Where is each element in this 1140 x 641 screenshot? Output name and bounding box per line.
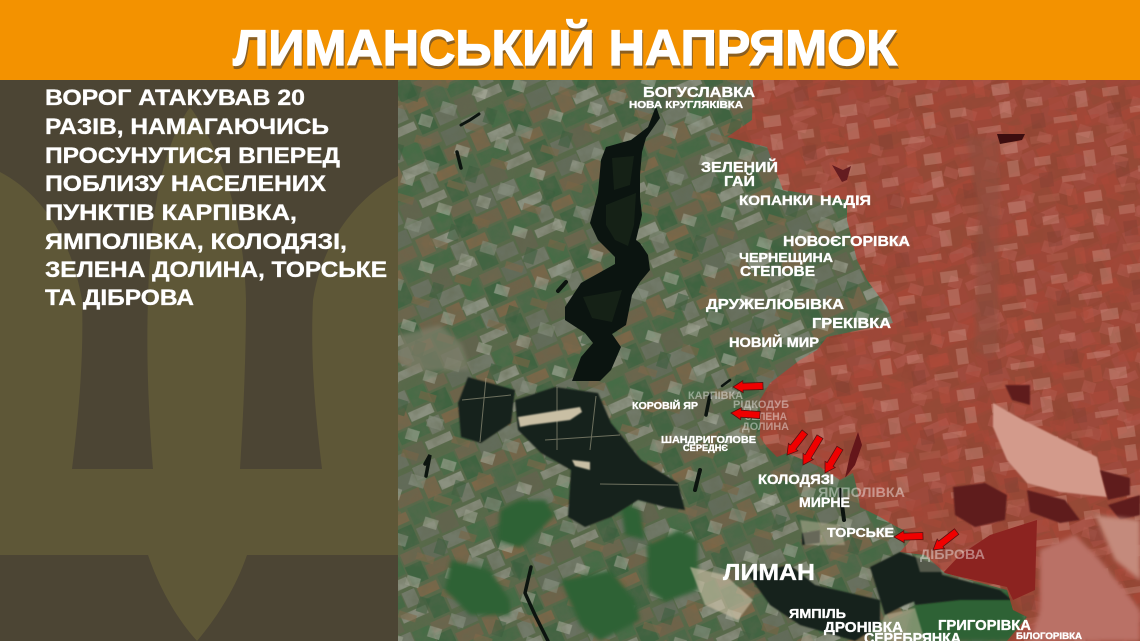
label: Bohuslavka: БОГУСЛАВКА bbox=[643, 84, 755, 101]
sand patches bbox=[518, 407, 962, 641]
town band bbox=[965, 135, 1000, 360]
description text block bbox=[45, 85, 387, 310]
label: Hai: ГАЙ bbox=[724, 172, 755, 190]
label: Druzheliubivka: ДРУЖЕЛЮБІВКА bbox=[706, 296, 844, 313]
label: Zelenyi: ЗЕЛЕНИЙ bbox=[701, 158, 778, 176]
line 6: ЯМПОЛІВКА, КОЛОДЯЗІ, bbox=[45, 229, 347, 254]
line 5: ПУНКТІВ КАРПІВКА, bbox=[45, 200, 297, 225]
label: Yampolivka: ЯМПОЛІВКА bbox=[818, 484, 905, 500]
header bar bbox=[0, 0, 1140, 80]
arrow: toward Dibrova bbox=[929, 527, 960, 555]
label: Dronivka: ДРОНІВКА bbox=[824, 620, 904, 636]
pale southern fields bbox=[1030, 535, 1140, 641]
label: Nova Kruhliakivka: НОВА КРУГЛЯКІВКА bbox=[629, 99, 743, 111]
title bbox=[233, 19, 898, 79]
label: Ridkodub: РІДКОДУБ bbox=[733, 399, 789, 411]
title shadow: ЛИМАНСЬКИЙ НАПРЯМОК bbox=[234, 22, 898, 79]
occupied territory red overlay bbox=[727, 80, 1140, 641]
attack arrows bbox=[731, 380, 960, 555]
line 3: ПРОСУНУТИСЯ ВПЕРЕД bbox=[45, 143, 340, 168]
label: Kopanky: КОПАНКИ bbox=[739, 192, 813, 208]
arrow: toward Karpivka bbox=[733, 380, 763, 393]
label: Nadiia: НАДІЯ bbox=[820, 192, 871, 208]
line 1: ВОРОГ АТАКУВАВ 20 bbox=[45, 85, 305, 110]
arrow: toward Zelena Dolyna bbox=[731, 407, 760, 421]
arrow: Kolodiazi one bbox=[782, 428, 810, 459]
dark red forests bbox=[953, 385, 1140, 527]
line 8: ТА ДІБРОВА bbox=[45, 285, 194, 310]
label: Novoiehorivka: НОВОЄГОРІВКА bbox=[783, 233, 910, 250]
label: Chernechshyna: ЧЕРНЕЩИНА bbox=[739, 250, 834, 265]
label: Zelena: ЗЕЛЕНА bbox=[745, 411, 787, 423]
label: Lyman: ЛИМАН bbox=[723, 559, 815, 585]
arrow: Kolodiazi two bbox=[798, 434, 825, 468]
line 7: ЗЕЛЕНА ДОЛИНА, ТОРСЬКЕ bbox=[45, 257, 387, 282]
arrow: toward Torske bbox=[894, 530, 923, 543]
line 4: ПОБЛИЗУ НАСЕЛЕНИХ bbox=[45, 171, 326, 196]
arrow: Kolodiazi three bbox=[820, 445, 845, 476]
label: Hrekivka: ГРЕКІВКА bbox=[812, 316, 892, 332]
river islands with dark forest bbox=[583, 156, 636, 322]
label: Dibrova: ДІБРОВА bbox=[920, 547, 985, 562]
pond in occupied area bbox=[997, 134, 1025, 144]
small streams and ponds bbox=[425, 114, 844, 641]
pale sand steppe bbox=[993, 403, 1107, 497]
label: Novyi Myr: НОВИЙ МИР bbox=[729, 335, 819, 350]
label: Shandryholove: ШАНДРИГОЛОВЕ bbox=[661, 435, 756, 446]
left panel background bbox=[0, 80, 398, 641]
dark forest block centre bbox=[515, 387, 685, 527]
dark forest block south bbox=[747, 530, 1012, 641]
label: Kolodiazi: КОЛОДЯЗІ bbox=[758, 471, 834, 487]
label: Serednie: СЕРЕДНЄ bbox=[683, 443, 729, 453]
label: Torske: ТОРСЬКЕ bbox=[827, 525, 894, 540]
green forest patches bbox=[445, 500, 1027, 641]
reservoir water bbox=[565, 106, 660, 381]
dark forest block west bbox=[458, 377, 515, 443]
label: Dolyna: ДОЛИНА bbox=[742, 421, 789, 433]
label: Karpivka: КАРПІВКА bbox=[688, 390, 743, 402]
label: Hryhorivka: ГРИГОРІВКА bbox=[938, 618, 1032, 634]
forest rides bbox=[462, 378, 678, 485]
label: Korovii Yar: КОРОВІЙ ЯР bbox=[632, 399, 698, 412]
line 2: РАЗІВ, НАМАГАЮЧИСЬ bbox=[45, 114, 329, 139]
satellite farmland base bbox=[398, 80, 1140, 641]
label: Stepove: СТЕПОВЕ bbox=[740, 263, 815, 280]
map labels bbox=[629, 84, 1082, 641]
label: Yampil: ЯМПІЛЬ bbox=[789, 606, 846, 621]
title text: ЛИМАНСЬКИЙ НАПРЯМОК bbox=[233, 19, 897, 76]
trident emblem watermark bbox=[0, 107, 398, 641]
town area west bbox=[398, 325, 470, 372]
map panel bbox=[398, 80, 1140, 641]
label: Myrne: МИРНЕ bbox=[799, 495, 850, 510]
